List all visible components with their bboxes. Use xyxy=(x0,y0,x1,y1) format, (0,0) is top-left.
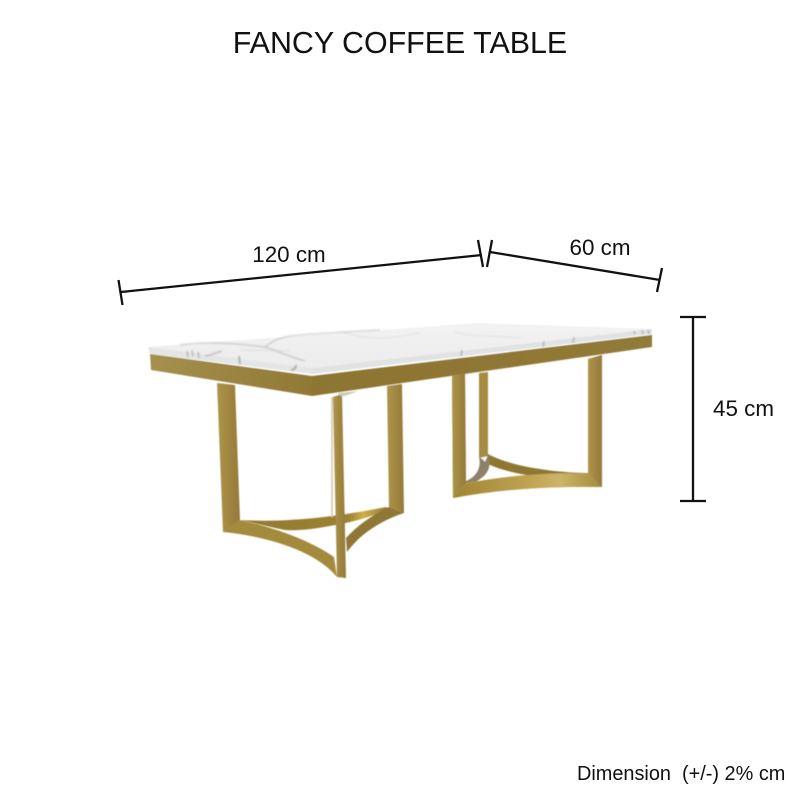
title: FANCY COFFEE TABLE xyxy=(233,26,567,60)
marble veins xyxy=(180,330,649,370)
dimension: height 45 cm: 45 cm xyxy=(713,396,774,421)
highlight sliver beside center leg xyxy=(331,397,333,517)
left back curved bar xyxy=(346,507,404,552)
left rear crossbar xyxy=(240,507,390,530)
dimension: width 60 cm: 60 cm xyxy=(570,235,630,260)
right frame legs and base xyxy=(452,355,602,498)
marble top surface xyxy=(148,323,652,368)
marble front edge xyxy=(312,329,652,374)
right chrome brace xyxy=(466,455,490,486)
left center leg xyxy=(333,394,346,578)
left outer leg xyxy=(217,383,240,532)
dimension: length 120 cm xyxy=(118,240,483,305)
left front curved bar xyxy=(223,520,337,577)
right curved crossbar xyxy=(488,454,590,478)
dimension: width 60 cm xyxy=(487,235,662,292)
center leg top bracket xyxy=(338,391,358,396)
apron left side xyxy=(150,354,312,396)
table illustration xyxy=(148,323,652,578)
right rear leg xyxy=(479,372,488,458)
marble left edge xyxy=(148,347,312,374)
left back-right leg xyxy=(387,384,404,513)
footnote: Dimension (+/-) 2% cm xyxy=(577,763,785,785)
apron front side xyxy=(312,335,652,396)
dimension: length 120 cm: 120 cm xyxy=(252,242,326,267)
